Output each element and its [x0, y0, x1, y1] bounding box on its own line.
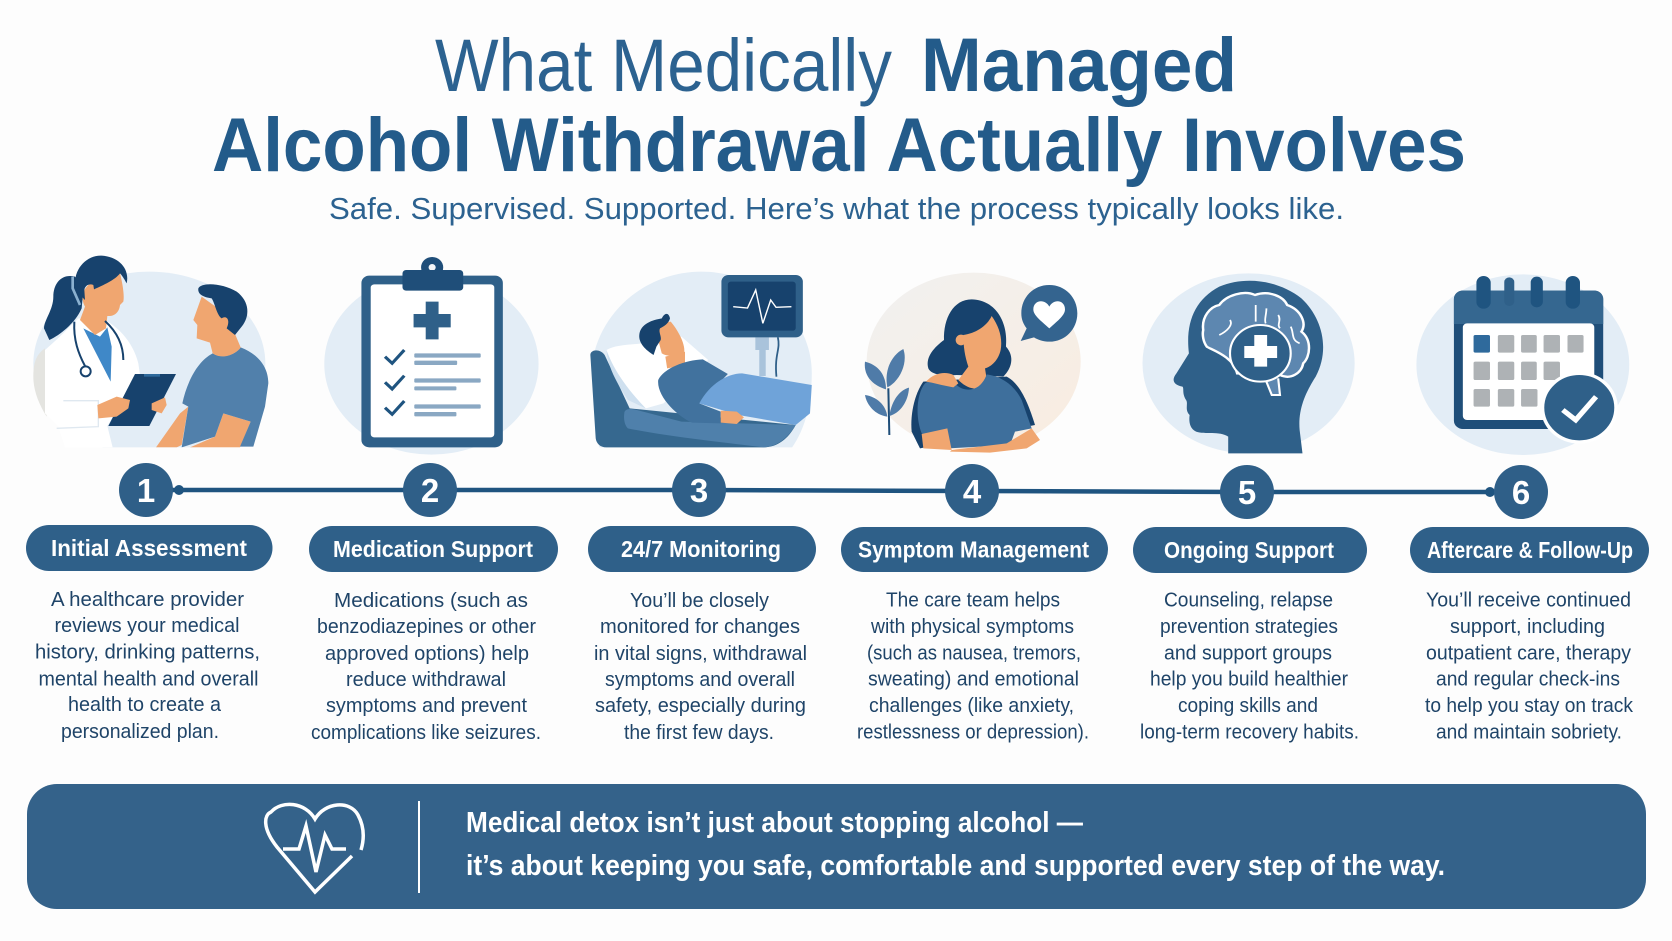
body text 4: challenges (like anxiety,	[869, 694, 1074, 717]
body text 4: restlessness or depression).	[857, 720, 1089, 744]
body text 6: and regular check-ins	[1436, 668, 1620, 690]
body text 1: A healthcare provider	[51, 588, 244, 611]
step number 1	[119, 463, 173, 517]
body text 2: symptoms and prevent	[326, 694, 527, 717]
body text 5: long-term recovery habits.	[1140, 720, 1359, 744]
pill heading: medication support: Medication Support	[333, 536, 533, 562]
body text 3	[594, 589, 807, 744]
body text 3: in vital signs, withdrawal	[594, 642, 807, 665]
body text 4	[857, 588, 1089, 744]
panel: step 1 initial assessment	[26, 256, 272, 743]
body text 1: personalized plan.	[61, 720, 219, 743]
body text 5: help you build healthier	[1150, 668, 1348, 690]
panel: step 2 medication support	[309, 257, 558, 744]
body text 5: Counseling, relapse	[1164, 588, 1333, 612]
subtitle: Safe. Supervised. Supported. Here’s what the process typically looks like.	[329, 191, 1344, 226]
body text 5: and support groups	[1164, 642, 1332, 664]
body text 2: complications like seizures.	[311, 721, 541, 744]
step number 5	[1220, 465, 1274, 519]
body text 2: approved options) help	[325, 642, 529, 665]
body text 4: sweating) and emotional	[868, 668, 1079, 690]
body text 6: outpatient care, therapy	[1426, 642, 1632, 664]
pill heading: symptom management: Symptom Management	[858, 536, 1089, 562]
body text 1: reviews your medical	[54, 614, 240, 637]
title: Alcohol Withdrawal Actually Involves	[212, 103, 1466, 188]
body text 3: safety, especially during	[595, 694, 806, 717]
icon: head with brain and cross	[1142, 273, 1355, 453]
icon: heart with pulse	[266, 804, 363, 892]
body text 1: health to create a	[68, 693, 222, 716]
icon: clipboard	[324, 257, 539, 455]
pill heading: aftercare and follow-up: Aftercare & Follow-Up	[1427, 537, 1633, 563]
pill heading: initial assessment	[26, 525, 272, 571]
body text 5: prevention strategies	[1160, 615, 1338, 638]
callout banner	[27, 784, 1646, 909]
pill heading: ongoing support: Ongoing Support	[1164, 537, 1334, 563]
body text 2: benzodiazepines or other	[317, 615, 536, 638]
pill heading: 24/7 monitoring	[588, 526, 816, 572]
step number 4	[945, 464, 999, 518]
step number 4: 4	[963, 473, 982, 510]
body text 6: support, including	[1450, 615, 1605, 638]
pill heading: initial assessment: Initial Assessment	[51, 535, 247, 561]
callout text: Medical detox isn’t just about stopping alcohol —	[466, 807, 1083, 839]
callout text	[466, 807, 1445, 882]
body text 5	[1140, 588, 1359, 744]
step number 6: 6	[1512, 474, 1530, 511]
body text 3: the first few days.	[624, 721, 774, 744]
pill heading: symptom management	[841, 527, 1108, 572]
pill heading: ongoing support	[1133, 527, 1367, 573]
panel: step 4 symptom management	[841, 273, 1108, 744]
body text 3: symptoms and overall	[605, 668, 795, 691]
body text 3: You’ll be closely	[630, 589, 770, 612]
body text 4: (such as nausea, tremors,	[867, 642, 1081, 664]
body text 6: and maintain sobriety.	[1436, 720, 1622, 744]
icon: supported woman with heart bubble	[865, 273, 1081, 453]
body text 6	[1425, 588, 1634, 744]
body text 4: The care team helps	[886, 588, 1060, 612]
icon: calendar with check	[1416, 274, 1629, 455]
step number 6	[1494, 465, 1548, 519]
icon: patient in bed with monitor	[590, 272, 812, 447]
step number 3	[672, 463, 726, 517]
pill heading: 24/7 monitoring: 24/7 Monitoring	[621, 536, 781, 562]
pill heading: aftercare and follow-up	[1410, 527, 1649, 573]
title: What Medically	[435, 24, 892, 107]
panel: step 3 24/7 monitoring	[588, 272, 816, 744]
step number 1: 1	[137, 472, 155, 509]
title: Managed	[921, 23, 1237, 108]
body text 4: with physical symptoms	[870, 615, 1074, 638]
body text 1	[35, 588, 260, 743]
panel: step 5 ongoing support	[1133, 273, 1367, 744]
title	[212, 23, 1466, 188]
step number 2	[403, 463, 457, 517]
icon: doctor and patient	[33, 256, 268, 455]
body text 1: mental health and overall	[38, 668, 258, 690]
step number 3: 3	[690, 472, 708, 509]
body text 5: coping skills and	[1178, 694, 1318, 717]
body text 6: to help you stay on track	[1425, 694, 1634, 717]
pill heading: medication support	[309, 526, 558, 572]
body text 1: history, drinking patterns,	[35, 640, 260, 664]
step number 2: 2	[421, 472, 439, 509]
divider	[418, 801, 420, 893]
callout text: it’s about keeping you safe, comfortable and supported every step of the way.	[466, 850, 1445, 882]
body text 2: reduce withdrawal	[346, 668, 506, 691]
step number 5: 5	[1238, 474, 1256, 511]
body text 3: monitored for changes	[600, 615, 800, 638]
panel: step 6 aftercare and follow-up	[1410, 274, 1649, 744]
body text 6: You’ll receive continued	[1426, 588, 1631, 612]
body text 2: Medications (such as	[334, 589, 528, 612]
timeline connector	[146, 485, 1521, 497]
body text 2	[311, 589, 541, 744]
